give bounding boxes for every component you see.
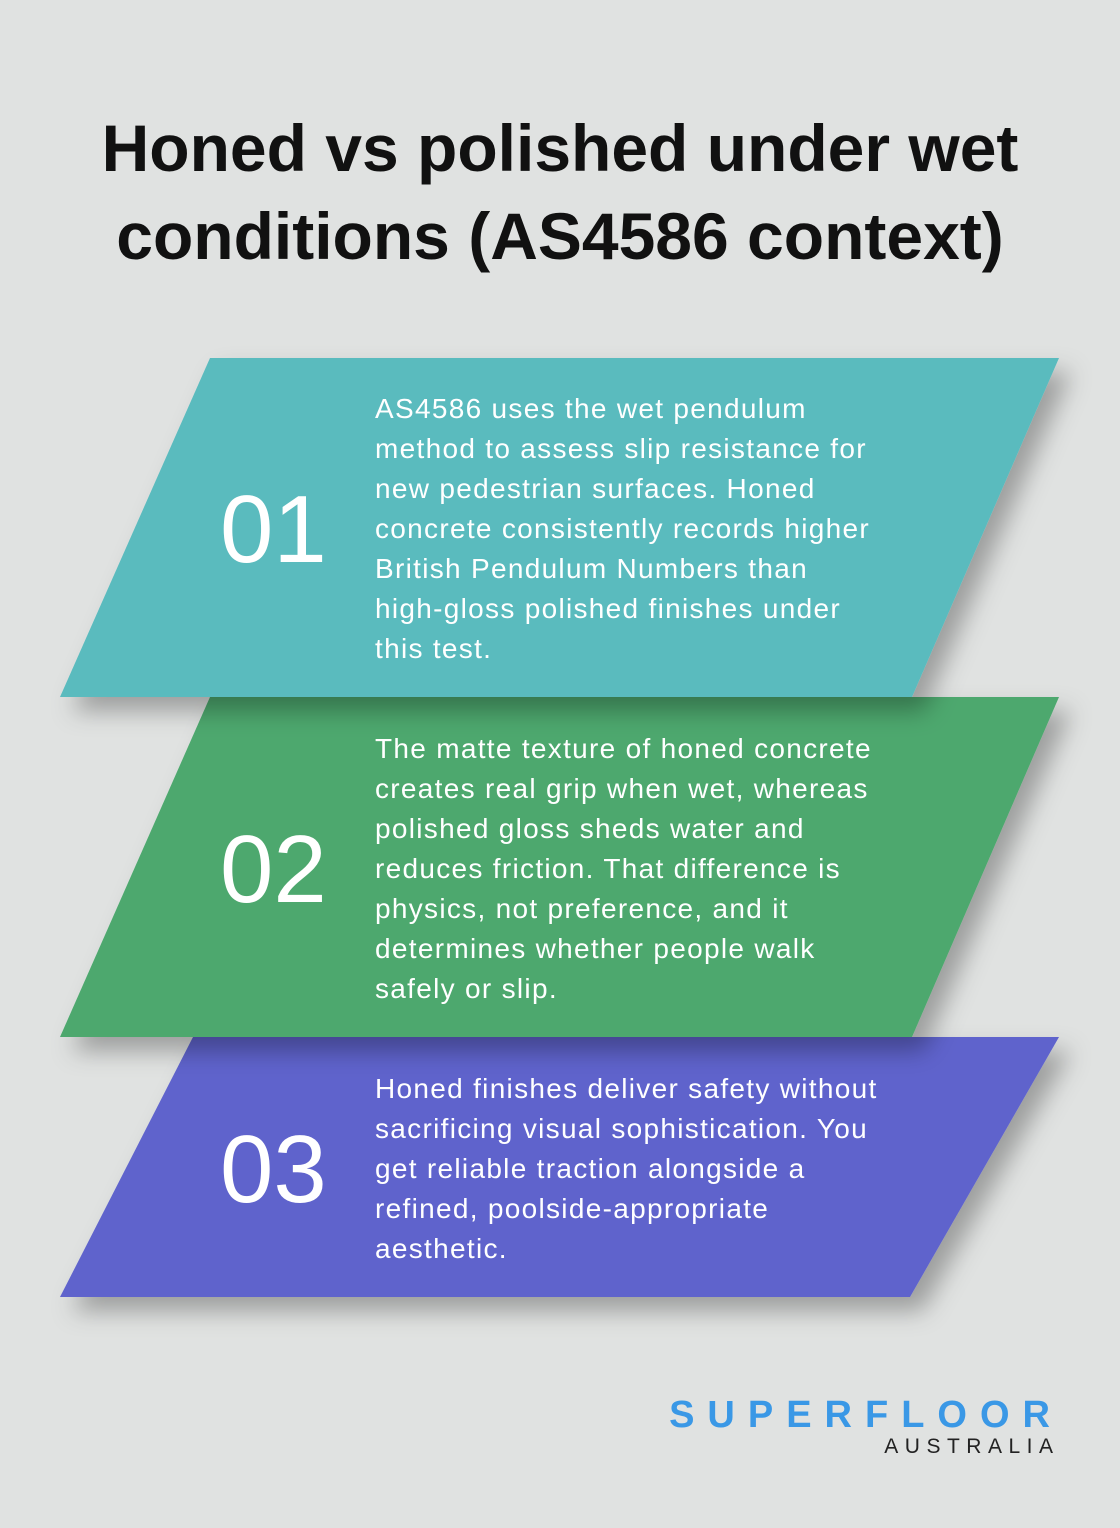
- title: conditions (AS4586 context): [116, 199, 1004, 273]
- panel 2 text: reduces friction. That difference is: [375, 853, 841, 884]
- panel 2 number: 02: [220, 816, 327, 923]
- panel 3 text: refined, poolside-appropriate: [375, 1193, 769, 1224]
- panel 2 text: The matte texture of honed concrete: [375, 733, 872, 764]
- panel 3 text: aesthetic.: [375, 1233, 508, 1264]
- panel 3 text: get reliable traction alongside a: [375, 1153, 805, 1184]
- panel 2 text: polished gloss sheds water and: [375, 813, 805, 844]
- panel 3 text: [375, 1073, 878, 1264]
- panel 1 text: [375, 393, 870, 664]
- panel 1 text: AS4586 uses the wet pendulum: [375, 393, 807, 424]
- title: [102, 111, 1018, 273]
- panel 1 text: high-gloss polished finishes under: [375, 593, 841, 624]
- title: Honed vs polished under wet: [102, 111, 1018, 185]
- panel 3 number: 03: [220, 1116, 327, 1223]
- panel 1 text: this test.: [375, 633, 492, 664]
- panel 1 text: British Pendulum Numbers than: [375, 553, 808, 584]
- panel 2 text: physics, not preference, and it: [375, 893, 789, 924]
- panel 1 text: method to assess slip resistance for: [375, 433, 867, 464]
- panel 1 number: 01: [220, 476, 327, 583]
- panel 3 shape: [60, 1037, 1059, 1297]
- panel 2 shape: [60, 697, 1059, 1037]
- logo: AUSTRALIA: [884, 1435, 1053, 1458]
- panel 3 text: Honed finishes deliver safety without: [375, 1073, 878, 1104]
- panel 1 text: concrete consistently records higher: [375, 513, 870, 544]
- logo: SUPERFLOOR: [669, 1394, 1050, 1436]
- panel 1 shape: [60, 358, 1059, 697]
- panel 2 text: [375, 733, 872, 1004]
- panel 2 text: safely or slip.: [375, 973, 558, 1004]
- panel 2 text: determines whether people walk: [375, 933, 816, 964]
- panel 2 text: creates real grip when wet, whereas: [375, 773, 869, 804]
- logo: [669, 1394, 1053, 1458]
- panel 1 text: new pedestrian surfaces. Honed: [375, 473, 816, 504]
- panel 3 text: sacrificing visual sophistication. You: [375, 1113, 868, 1144]
